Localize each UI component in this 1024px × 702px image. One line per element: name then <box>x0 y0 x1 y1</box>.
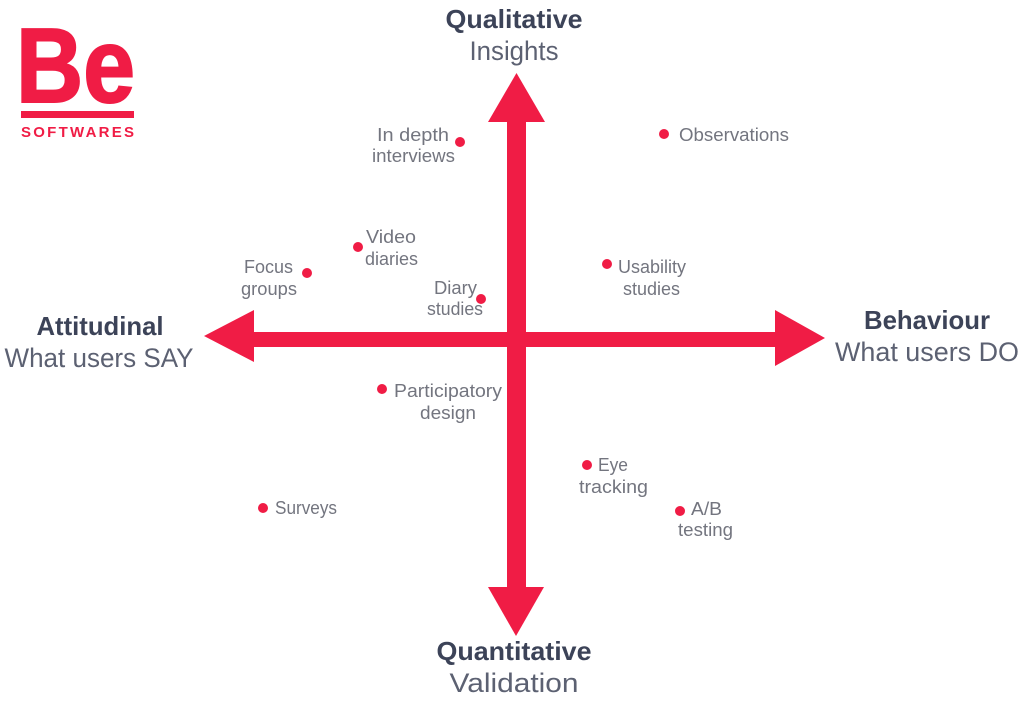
logo: Be Softwares: SOFTWARES <box>21 124 134 141</box>
heading: Attitudinal What users SAY <box>4 311 194 373</box>
item: Eye tracking: tracking <box>579 477 648 497</box>
item: Eye tracking: Eye <box>598 455 628 475</box>
heading: Behaviour What users DO: What users DO <box>835 337 1019 367</box>
heading: Attitudinal What users SAY: What users SAY <box>4 343 194 373</box>
item: Usability studies: studies <box>623 279 680 299</box>
item: Observations: Observations <box>679 125 789 145</box>
item: Usability studies: Usability <box>618 257 686 277</box>
item: Focus groups: groups <box>241 279 297 299</box>
arrow: down <box>488 340 544 636</box>
item: Surveys: Surveys <box>275 498 337 518</box>
item: In depth interviews <box>372 125 465 166</box>
item: In depth interviews: In depth <box>377 125 449 145</box>
quadrant axes arrows <box>204 73 825 636</box>
item: A/B testing: testing <box>678 520 733 540</box>
heading: Quantitative Validation <box>436 636 592 698</box>
item: Diary studies <box>427 278 486 319</box>
heading: Quantitative Validation: Quantitative <box>436 636 592 666</box>
heading: Attitudinal What users SAY: Attitudinal <box>36 311 164 341</box>
item: In depth interviews: interviews <box>372 146 455 166</box>
heading: Behaviour What users DO: Behaviour <box>864 305 990 335</box>
heading: Qualitative Insights <box>446 4 582 66</box>
item: Usability studies <box>602 257 686 299</box>
item: Participatory design: Participatory <box>394 381 502 401</box>
logo: Be Softwares: Be <box>16 7 135 125</box>
arrow: right <box>520 310 825 366</box>
heading: Quantitative Validation: Validation <box>450 668 578 698</box>
arrow: up <box>488 73 545 348</box>
item: A/B testing: A/B <box>691 499 722 519</box>
item: Eye tracking <box>579 455 648 497</box>
item: Video diaries: Video <box>366 227 416 247</box>
arrow: left <box>204 310 512 362</box>
item: Participatory design: design <box>420 403 476 423</box>
item: Focus groups <box>241 257 312 299</box>
item: Focus groups: Focus <box>244 257 293 277</box>
item: Video diaries <box>353 227 418 269</box>
item: Video diaries: diaries <box>365 249 418 269</box>
item: Diary studies: studies <box>427 299 483 319</box>
heading: Qualitative Insights: Qualitative <box>446 4 582 34</box>
heading: Behaviour What users DO <box>835 305 1019 367</box>
item: Diary studies: Diary <box>434 278 477 298</box>
heading: Qualitative Insights: Insights <box>470 36 558 66</box>
item: Participatory design <box>377 381 502 423</box>
item: A/B testing <box>675 499 733 540</box>
